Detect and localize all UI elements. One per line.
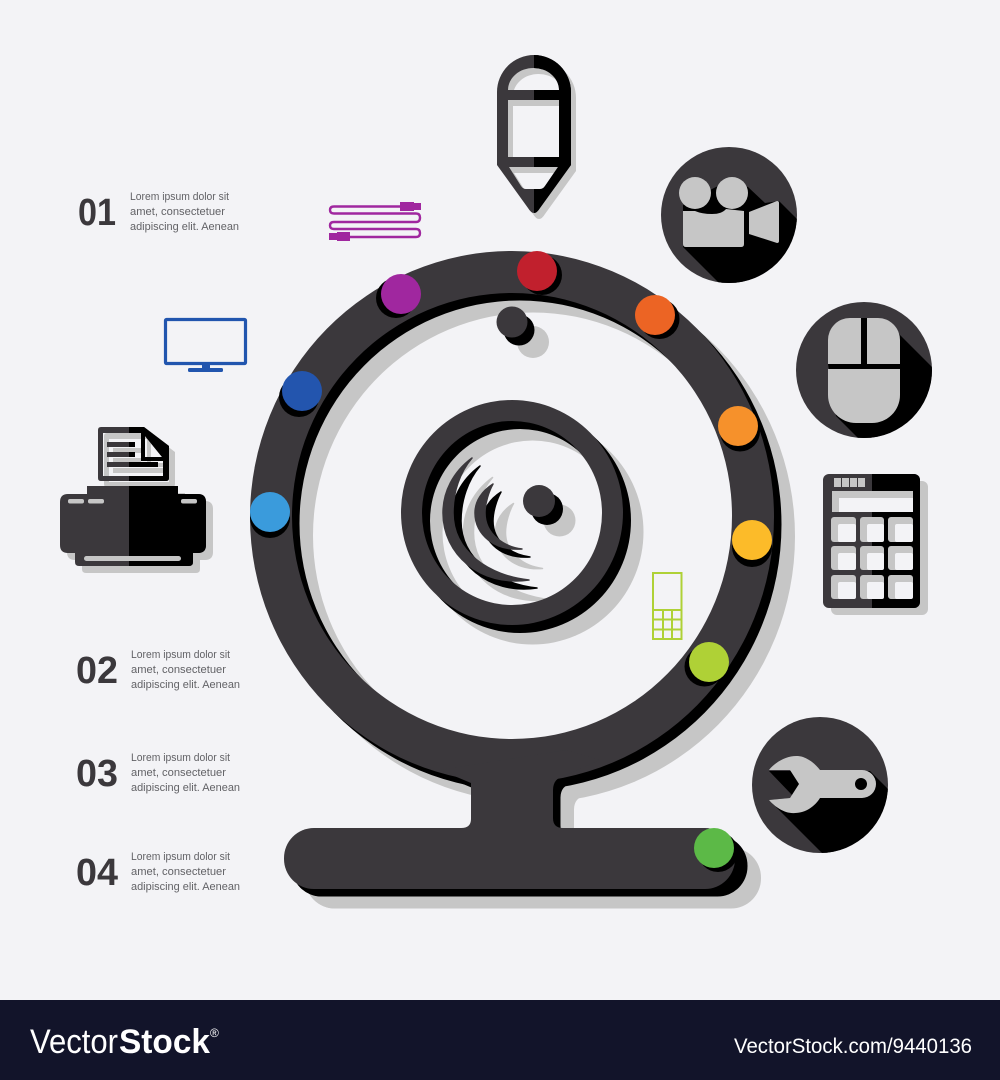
footer bar: ® bbox=[210, 1026, 219, 1040]
lens black offset bbox=[409, 408, 631, 633]
marker: lime bbox=[689, 642, 729, 682]
text block 01: 01 bbox=[78, 192, 116, 234]
coloured markers on the ring bbox=[250, 251, 772, 872]
icon: printer bbox=[60, 427, 213, 573]
marker: yellow bbox=[732, 520, 772, 560]
small dot bbox=[496, 306, 528, 338]
stand base long shadow bbox=[305, 848, 761, 908]
text block 01: amet, consectetuer bbox=[130, 206, 225, 218]
text block 01: Lorem ipsum dolor sit bbox=[130, 191, 229, 203]
stand base black offset bbox=[292, 836, 748, 896]
text block 04: adipiscing elit. Aenean bbox=[131, 881, 240, 893]
text block 01 bbox=[78, 191, 239, 234]
text block 02: amet, consectetuer bbox=[131, 664, 226, 676]
text block 03: Lorem ipsum dolor sit bbox=[131, 752, 230, 764]
icon: monitor bbox=[166, 320, 246, 372]
webcam body bbox=[250, 251, 774, 889]
marker: orange bbox=[718, 406, 758, 446]
marker: purple bbox=[381, 274, 421, 314]
icon: USB cable bbox=[329, 202, 421, 241]
text block 02 bbox=[76, 649, 240, 692]
marker: green bbox=[694, 828, 734, 868]
marker: red-orange bbox=[635, 295, 675, 335]
text block 02: adipiscing elit. Aenean bbox=[131, 679, 240, 691]
text block 03: adipiscing elit. Aenean bbox=[131, 782, 240, 794]
webcam long shadow bbox=[271, 270, 795, 908]
text block 04: amet, consectetuer bbox=[131, 866, 226, 878]
icon: wrench bbox=[752, 717, 888, 853]
webcam lens shadow bbox=[422, 420, 644, 644]
text block 02: 02 bbox=[76, 650, 118, 692]
text block 02: Lorem ipsum dolor sit bbox=[131, 649, 230, 661]
small dot black offset bbox=[504, 314, 534, 346]
webcam illustration bbox=[250, 251, 795, 908]
text block 03 bbox=[76, 752, 240, 795]
small dot shadow bbox=[517, 326, 549, 358]
text block 04: Lorem ipsum dolor sit bbox=[131, 851, 230, 863]
icon: video camera bbox=[661, 147, 797, 283]
footer bar bbox=[0, 1000, 1000, 1080]
marker: light blue bbox=[250, 492, 290, 532]
footer bar: Stock bbox=[119, 1023, 210, 1061]
text block 03: 03 bbox=[76, 753, 118, 795]
footer bar: VectorStock.com/9440136 bbox=[734, 1035, 972, 1058]
lens bbox=[401, 400, 623, 625]
text block 04: 04 bbox=[76, 852, 118, 894]
icon: computer mouse bbox=[796, 302, 932, 438]
icon: mobile phone bbox=[653, 573, 682, 639]
text block 03: amet, consectetuer bbox=[131, 767, 226, 779]
footer bar: Vector bbox=[30, 1023, 118, 1061]
text block 04 bbox=[76, 851, 240, 894]
marker: red bbox=[517, 251, 557, 291]
webcam black offset bbox=[258, 258, 782, 896]
marker: blue bbox=[282, 371, 322, 411]
icon: pencil bbox=[497, 55, 576, 219]
marker shadows bbox=[250, 255, 772, 872]
icon: calculator bbox=[823, 474, 928, 615]
text block 01: adipiscing elit. Aenean bbox=[130, 221, 239, 233]
